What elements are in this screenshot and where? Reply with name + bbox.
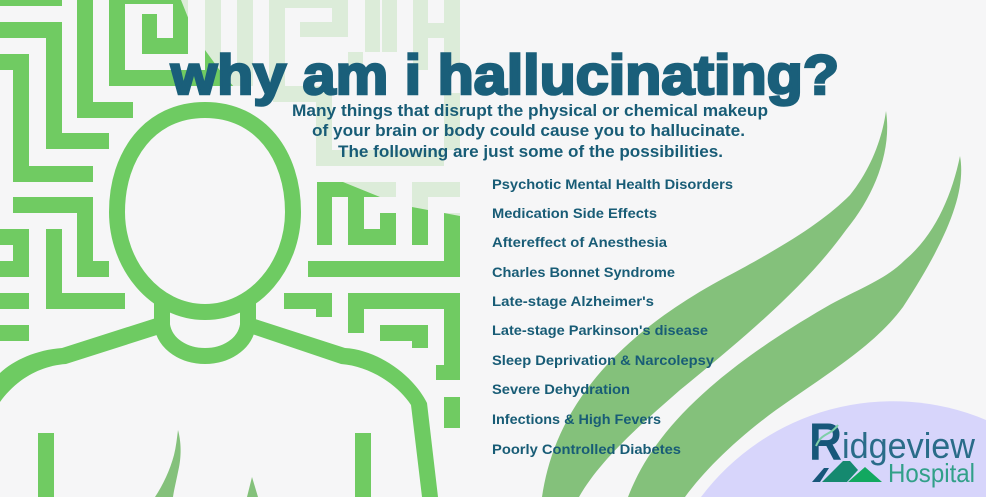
intro text xyxy=(292,102,768,161)
neck xyxy=(162,303,248,356)
person outline icon xyxy=(0,110,438,497)
hospital logo: idgeview xyxy=(842,425,976,466)
lilac corner circle xyxy=(701,401,986,497)
list of possible causes: Late-stage Parkinson's disease xyxy=(492,322,708,338)
right shoulder and arm xyxy=(252,318,438,497)
list of possible causes: Poorly Controlled Diabetes xyxy=(492,441,681,457)
list of possible causes: Sleep Deprivation & Narcolepsy xyxy=(492,352,714,368)
list of possible causes: Medication Side Effects xyxy=(492,205,657,221)
intro text: of your brain or body could cause you to hallucinate. xyxy=(312,122,745,140)
intro text: The following are just some of the possibilities. xyxy=(338,143,723,161)
list of possible causes xyxy=(492,176,733,457)
title: why am i hallucinating? xyxy=(170,43,839,106)
list of possible causes: Charles Bonnet Syndrome xyxy=(492,264,675,280)
list of possible causes: Aftereffect of Anesthesia xyxy=(492,234,667,250)
faded maze pattern xyxy=(0,0,460,497)
green swooshes xyxy=(155,111,961,497)
left shoulder xyxy=(0,318,160,402)
hospital logo xyxy=(809,413,976,488)
logo wave accent xyxy=(816,425,838,446)
list of possible causes: Infections & High Fevers xyxy=(492,411,661,427)
intro text: Many things that disrupt the physical or chemical makeup xyxy=(292,102,768,120)
green maze pattern xyxy=(0,0,460,497)
head xyxy=(117,110,293,312)
list of possible causes: Severe Dehydration xyxy=(492,381,630,397)
logo mountains xyxy=(812,461,882,482)
list of possible causes: Psychotic Mental Health Disorders xyxy=(492,176,733,192)
logo wordmark Ridgeview: R xyxy=(809,413,842,472)
logo wordmark Hospital: Hospital xyxy=(888,458,975,488)
list of possible causes: Late-stage Alzheimer's xyxy=(492,293,654,309)
